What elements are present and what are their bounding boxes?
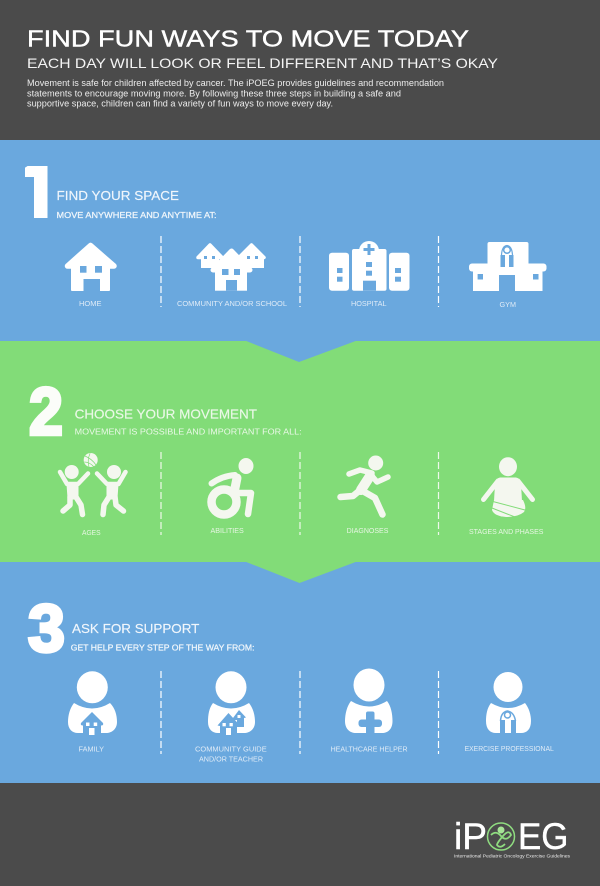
label: community guide and/or teacher: AND/OR TEACHER <box>199 757 263 764</box>
icon: community houses <box>198 245 264 291</box>
label: ages: AGES <box>82 530 101 537</box>
step number 1: 1 <box>22 150 64 234</box>
panel: footer <box>0 783 600 886</box>
icon: gym <box>469 242 546 291</box>
logo: iPOEG: International Pediatric Oncology Exercise Guidelines <box>454 854 571 860</box>
subheading: GET HELP EVERY STEP OF THE WAY FROM: <box>71 643 254 653</box>
heading: CHOOSE YOUR MOVEMENT <box>75 407 257 422</box>
label: gym: GYM <box>500 302 516 309</box>
label: community guide and/or teacher <box>195 747 267 764</box>
label: family: FAMILY <box>78 747 104 754</box>
intro text: statements to encourage moving more. By following these three steps in building a safe and <box>27 88 401 98</box>
label: community: COMMUNITY AND/OR SCHOOL <box>177 301 287 308</box>
panel: step 3 ask for support <box>0 562 600 783</box>
panel: header <box>0 0 600 140</box>
subtitle: EACH DAY WILL LOOK OR FEEL DIFFERENT AND THAT’S OKAY <box>27 55 499 71</box>
subheading: MOVE ANYWHERE AND ANYTIME AT: <box>56 210 216 220</box>
logo: iPOEG: EG <box>518 815 568 857</box>
icon: family person with house <box>68 671 117 735</box>
icon: runner <box>340 456 388 514</box>
logo: iPOEG <box>454 815 571 860</box>
icon: children playing with ball <box>60 453 126 514</box>
label: abilities: ABILITIES <box>210 528 244 535</box>
label: healthcare helper: HEALTHCARE HELPER <box>331 747 408 754</box>
icon: seated meditation <box>484 457 532 517</box>
heading: FIND YOUR SPACE <box>56 188 179 203</box>
panel: step 2 choose your movement <box>0 340 600 562</box>
intro text: Movement is safe for children affected by cancer. The iPOEG provides guidelines and recommendation <box>27 78 444 88</box>
title: FIND FUN WAYS TO MOVE TODAY <box>27 26 469 52</box>
icon: home <box>68 246 114 291</box>
subheading: MOVEMENT IS POSSIBLE AND IMPORTANT FOR ALL: <box>75 427 302 437</box>
logo: iPOEG: iP <box>454 815 487 857</box>
label: exercise professional: EXERCISE PROFESSIONAL <box>465 746 554 753</box>
label: stages and phases: STAGES AND PHASES <box>469 529 544 536</box>
label: diagnoses: DIAGNOSES <box>347 528 389 535</box>
intro text <box>27 78 444 109</box>
icon: healthcare helper person with cross <box>345 668 392 734</box>
arrow: blue chevron <box>245 340 357 362</box>
step number 2: 2 <box>29 374 63 449</box>
label: home: HOME <box>79 301 102 308</box>
step number 3: 3 <box>28 592 65 667</box>
arrow: green chevron <box>245 562 357 583</box>
intro text: supportive space, children can find a variety of fun ways to move every day. <box>27 99 333 109</box>
heading: ASK FOR SUPPORT <box>72 621 199 636</box>
icon: community guide person with houses <box>208 671 255 735</box>
icon: hospital <box>329 241 410 291</box>
icon: wheelchair user <box>212 458 254 514</box>
label: community guide and/or teacher: COMMUNITY GUIDE <box>195 747 267 754</box>
panel: step 1 find your space <box>0 140 600 341</box>
icon: exercise professional person with gym symbol <box>486 672 531 734</box>
label: hospital: HOSPITAL <box>351 301 387 308</box>
